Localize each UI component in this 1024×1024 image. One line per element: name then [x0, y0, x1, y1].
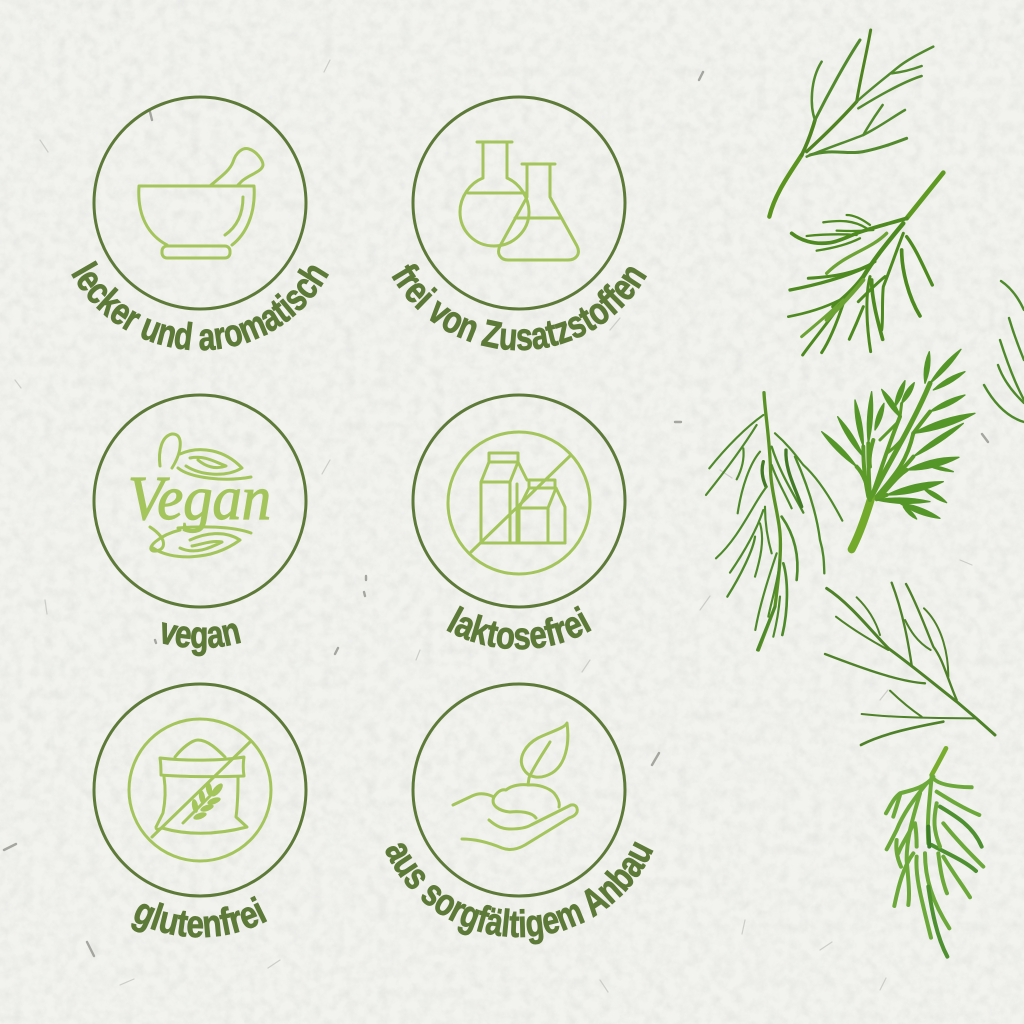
panel: glutenfrei [92, 682, 308, 938]
label: frei von Zusatzstoffen [392, 264, 648, 351]
dill sprig at right edge [984, 281, 1024, 422]
panel: lecker und aromatisch [71, 96, 329, 351]
icon: laboratory flasks [460, 142, 578, 260]
dill sprig 4 [822, 349, 975, 549]
badge ring [94, 97, 306, 309]
label: glutenfrei [131, 896, 268, 938]
dill sprig 2 [788, 173, 943, 355]
dill sprig 5 [825, 583, 995, 745]
icon: crossed-out flour sack [129, 719, 271, 861]
label: lecker und aromatisch [71, 260, 329, 351]
panel: frei von Zusatzstoffen [392, 96, 648, 351]
panel: aus sorgfältigem Anbau [386, 682, 654, 944]
badge ring [413, 97, 625, 309]
icon: mortar and pestle [139, 149, 263, 258]
dill sprig 3 [706, 393, 842, 650]
dill sprig 6 [886, 748, 983, 957]
label: aus sorgfältigem Anbau [386, 841, 654, 944]
badge ring [413, 395, 625, 607]
panel: vegan [92, 394, 308, 656]
icon: Vegan script logo: Vegan [128, 465, 271, 533]
label: laktosefrei [446, 605, 592, 650]
badge ring [94, 684, 306, 896]
icon: Vegan script logo [128, 434, 271, 557]
badge ring [94, 395, 306, 607]
label: vegan [162, 622, 242, 656]
dill sprig 1 [769, 30, 933, 217]
panel: laktosefrei [412, 394, 626, 650]
icon: crossed-out milk cartons [448, 432, 590, 574]
badge ring [413, 684, 625, 896]
icon: hand with seedling [453, 723, 577, 849]
